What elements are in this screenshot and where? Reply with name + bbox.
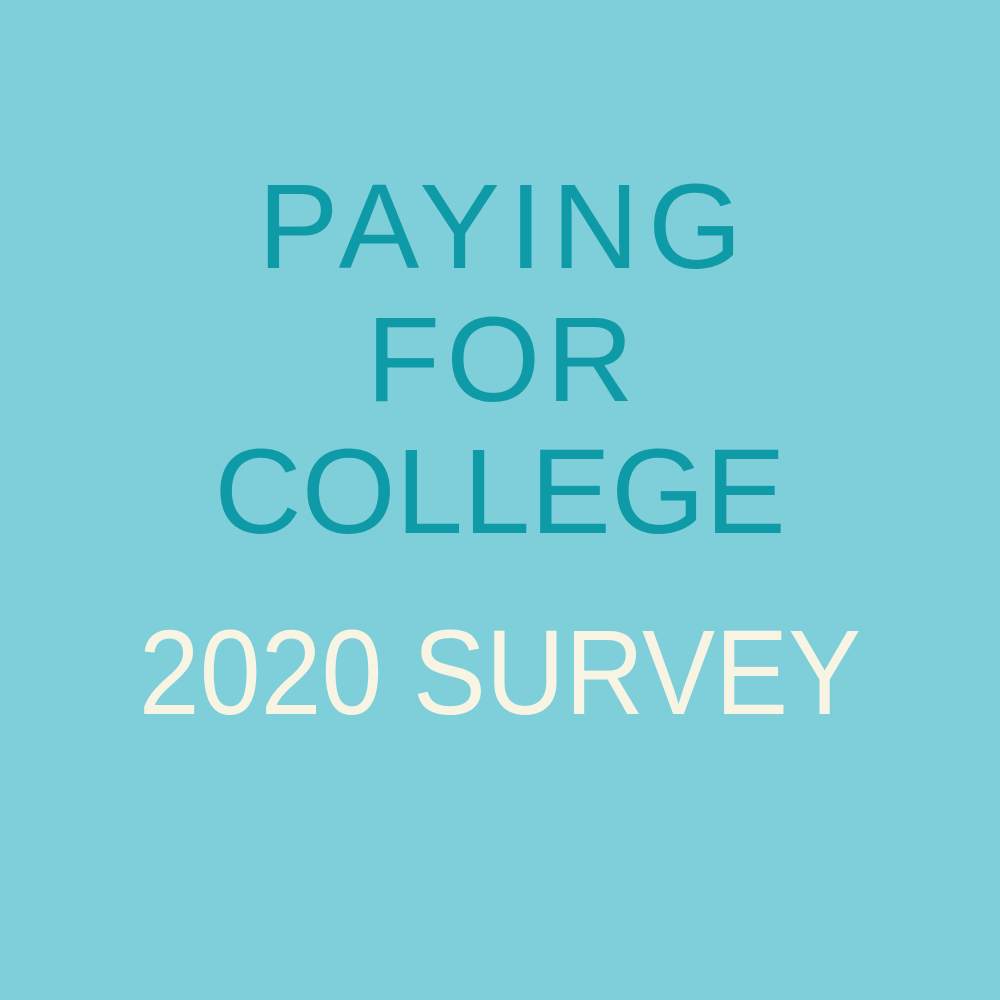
title line: PAYING: PAYING <box>258 158 751 294</box>
title line: FOR: FOR <box>366 291 640 427</box>
subtitle: 2020 SURVEY: 2020 SURVEY <box>139 604 861 740</box>
title <box>214 158 786 559</box>
title line: COLLEGE: COLLEGE <box>214 423 786 559</box>
